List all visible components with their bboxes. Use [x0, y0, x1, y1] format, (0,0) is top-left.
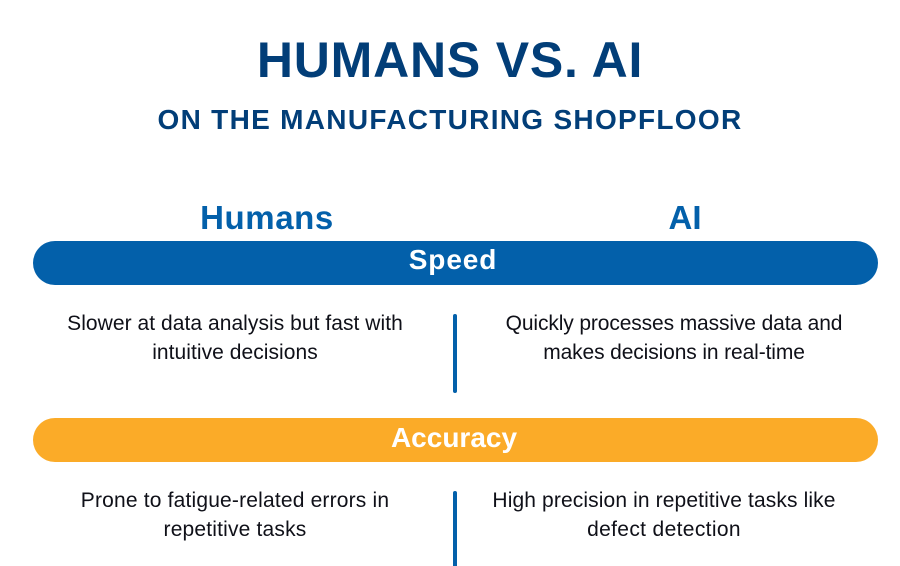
accuracy: humans text	[81, 489, 389, 541]
column heading: AI: AI	[668, 199, 702, 236]
speed divider	[453, 314, 457, 393]
accuracy divider	[453, 491, 457, 566]
accuracy: AI text	[492, 489, 836, 541]
speed banner	[33, 241, 878, 285]
speed: AI text: Quickly processes massive data and	[506, 312, 842, 335]
speed: AI text	[506, 312, 842, 364]
subtitle: ON THE MANUFACTURING SHOPFLOOR	[158, 104, 742, 135]
accuracy: humans text: repetitive tasks	[164, 518, 306, 541]
speed: humans text: intuitive decisions	[152, 341, 318, 364]
accuracy: humans text: Prone to fatigue-related errors in	[81, 489, 389, 512]
speed: humans text: Slower at data analysis but fast with	[67, 312, 403, 335]
title: HUMANS VS. AI	[257, 32, 643, 88]
accuracy label: Accuracy	[391, 422, 517, 453]
speed label: Speed	[409, 244, 497, 275]
column heading: humans: Humans	[200, 199, 334, 236]
speed: AI text: makes decisions in real-time	[543, 341, 805, 364]
speed: humans text	[67, 312, 403, 364]
accuracy banner	[33, 418, 878, 462]
accuracy: AI text: High precision in repetitive tasks like	[492, 489, 836, 512]
accuracy: AI text: defect detection	[587, 518, 741, 541]
